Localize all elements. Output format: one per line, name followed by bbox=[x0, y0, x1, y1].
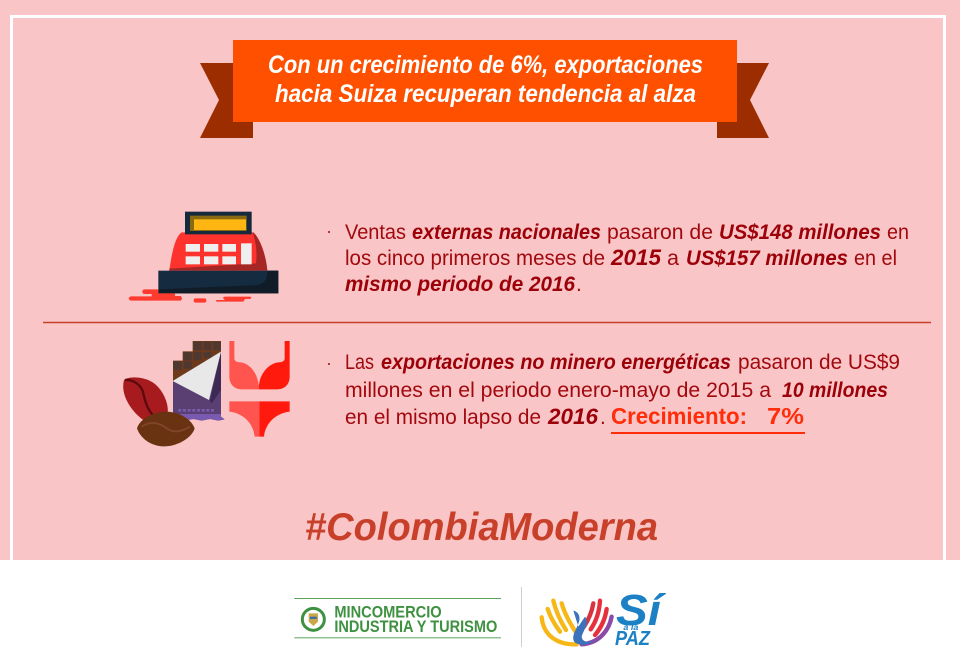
text block: exportaciones no minero energéticas: 2016 bbox=[547, 404, 599, 429]
logo: Sí a la Paz: Sí bbox=[616, 587, 666, 635]
icon: swimwear bottom bbox=[229, 401, 290, 437]
title text: Con un crecimiento de 6%, exportaciones bbox=[268, 51, 703, 79]
title text: hacia Suiza recuperan tendencia al alza bbox=[275, 80, 696, 108]
text block: ventas externas: mismo periodo de 2016 bbox=[345, 273, 575, 296]
text block: ventas externas: US$157 millones bbox=[686, 247, 848, 270]
separator bbox=[521, 587, 522, 647]
divider bbox=[43, 322, 931, 324]
icon: cacao, chocolate and swimwear bbox=[123, 341, 290, 446]
text block: ventas externas: en el bbox=[854, 247, 897, 270]
icon: chocolate bar bbox=[172, 341, 225, 421]
icon: coffee bean brown bbox=[137, 412, 195, 446]
logo: Mincomercio: INDUSTRIA Y TURISMO bbox=[334, 617, 497, 636]
text block: exportaciones no minero energéticas: exportaciones no minero energéticas bbox=[381, 351, 731, 374]
callout: crecimiento: Crecimiento: bbox=[611, 403, 747, 429]
text block: ventas externas: 2015 bbox=[610, 245, 662, 270]
text block: exportaciones no minero energéticas: Las bbox=[345, 351, 374, 374]
text block: exportaciones no minero energéticas: pasaron de US$9 bbox=[738, 351, 900, 374]
hashtag: #ColombiaModerna bbox=[305, 506, 658, 549]
text block: ventas externas: externas nacionales bbox=[412, 221, 601, 244]
text block: exportaciones no minero energéticas: . bbox=[600, 406, 606, 429]
text block: ventas externas bbox=[328, 221, 909, 296]
logo: Sí a la Paz: a la bbox=[623, 623, 639, 632]
text block: exportaciones no minero energéticas bbox=[328, 351, 900, 434]
icon: coffee bean red bbox=[123, 377, 168, 420]
text block: ventas externas: a bbox=[667, 247, 679, 270]
text block: ventas externas: Ventas bbox=[345, 221, 406, 244]
title banner bbox=[200, 40, 769, 138]
text block: exportaciones no minero energéticas: 10 millones bbox=[782, 379, 888, 402]
logo: Sí a la Paz: PAZ bbox=[615, 628, 651, 650]
callout: crecimiento bbox=[611, 403, 805, 434]
logo: Mincomercio: MINCOMERCIO bbox=[334, 603, 442, 622]
text block: ventas externas: en bbox=[887, 221, 909, 244]
logo: Mincomercio bbox=[294, 598, 501, 638]
logo: Sí a la Paz bbox=[542, 587, 666, 650]
text block: ventas externas: US$148 millones bbox=[719, 221, 881, 244]
text block: ventas externas: . bbox=[576, 273, 582, 296]
text block: exportaciones no minero energéticas: en el mismo lapso de bbox=[345, 406, 541, 429]
icon: cash register bbox=[129, 212, 278, 303]
callout: crecimiento: 7% bbox=[767, 403, 804, 429]
icon: swimwear top bbox=[229, 341, 290, 389]
text block: exportaciones no minero energéticas: millones en el periodo enero-mayo de 2015 a bbox=[345, 379, 771, 402]
text block: ventas externas: los cinco primeros meses de bbox=[345, 247, 605, 270]
text block: ventas externas: pasaron de bbox=[607, 221, 713, 244]
